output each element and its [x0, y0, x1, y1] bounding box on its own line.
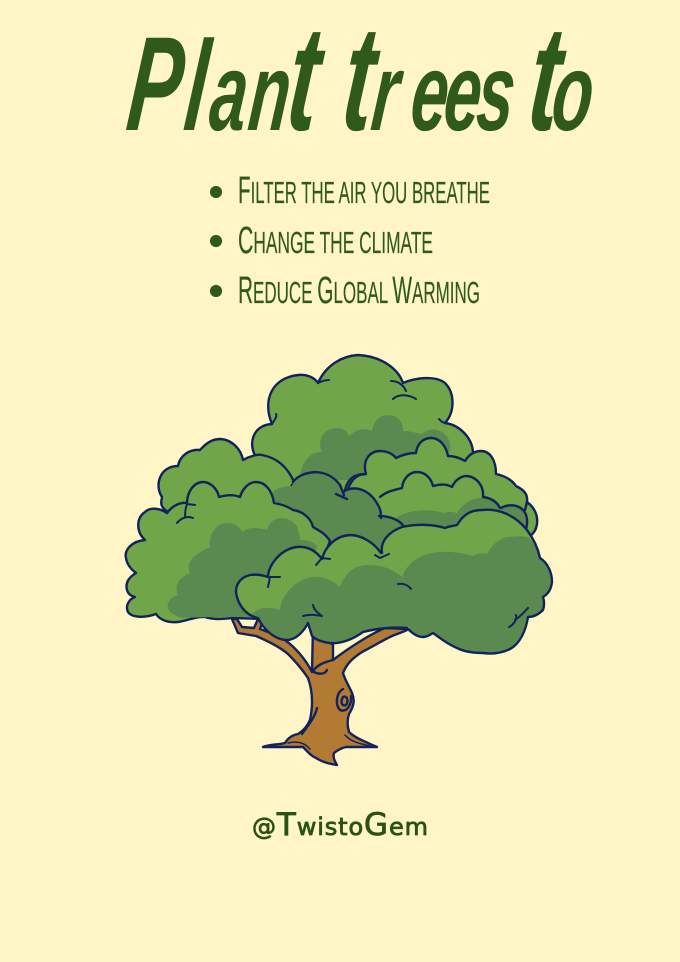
bullet: change the climate: CHANGE THE CLIMATE: [238, 220, 433, 262]
title: P: [121, 9, 192, 159]
title: e: [406, 32, 455, 154]
title: s: [472, 32, 540, 154]
bullet: filter the air: [210, 170, 490, 212]
crown: right big lobe: [372, 510, 552, 654]
handle: @TwistoGem: [252, 807, 428, 843]
title: t: [522, 0, 573, 163]
trunk and branches: [232, 619, 409, 765]
crown: upper left lobe: [159, 439, 294, 520]
crown: back top lobe: [252, 355, 473, 520]
bullet: filter the air: FILTER THE AIR YOU BREATHE: [238, 170, 490, 212]
title: l: [179, 15, 217, 158]
title: o: [547, 32, 600, 154]
crown: left front lobe: [126, 482, 330, 622]
bullet: reduce global warming: REDUCE GLOBAL WARMING: [238, 270, 480, 312]
crown: front lobe: [236, 535, 412, 643]
crown: right middle lobes: [345, 438, 537, 570]
bullet list: [210, 170, 490, 312]
title: t: [336, 0, 387, 163]
title: t: [281, 0, 353, 163]
bullet: change the climate: [210, 220, 433, 262]
title: n: [244, 32, 297, 154]
title: a: [205, 32, 254, 154]
title: e: [439, 32, 488, 154]
tree illustration: [126, 355, 552, 765]
title: r: [367, 32, 409, 154]
crown: center dark lobe: [270, 472, 404, 600]
